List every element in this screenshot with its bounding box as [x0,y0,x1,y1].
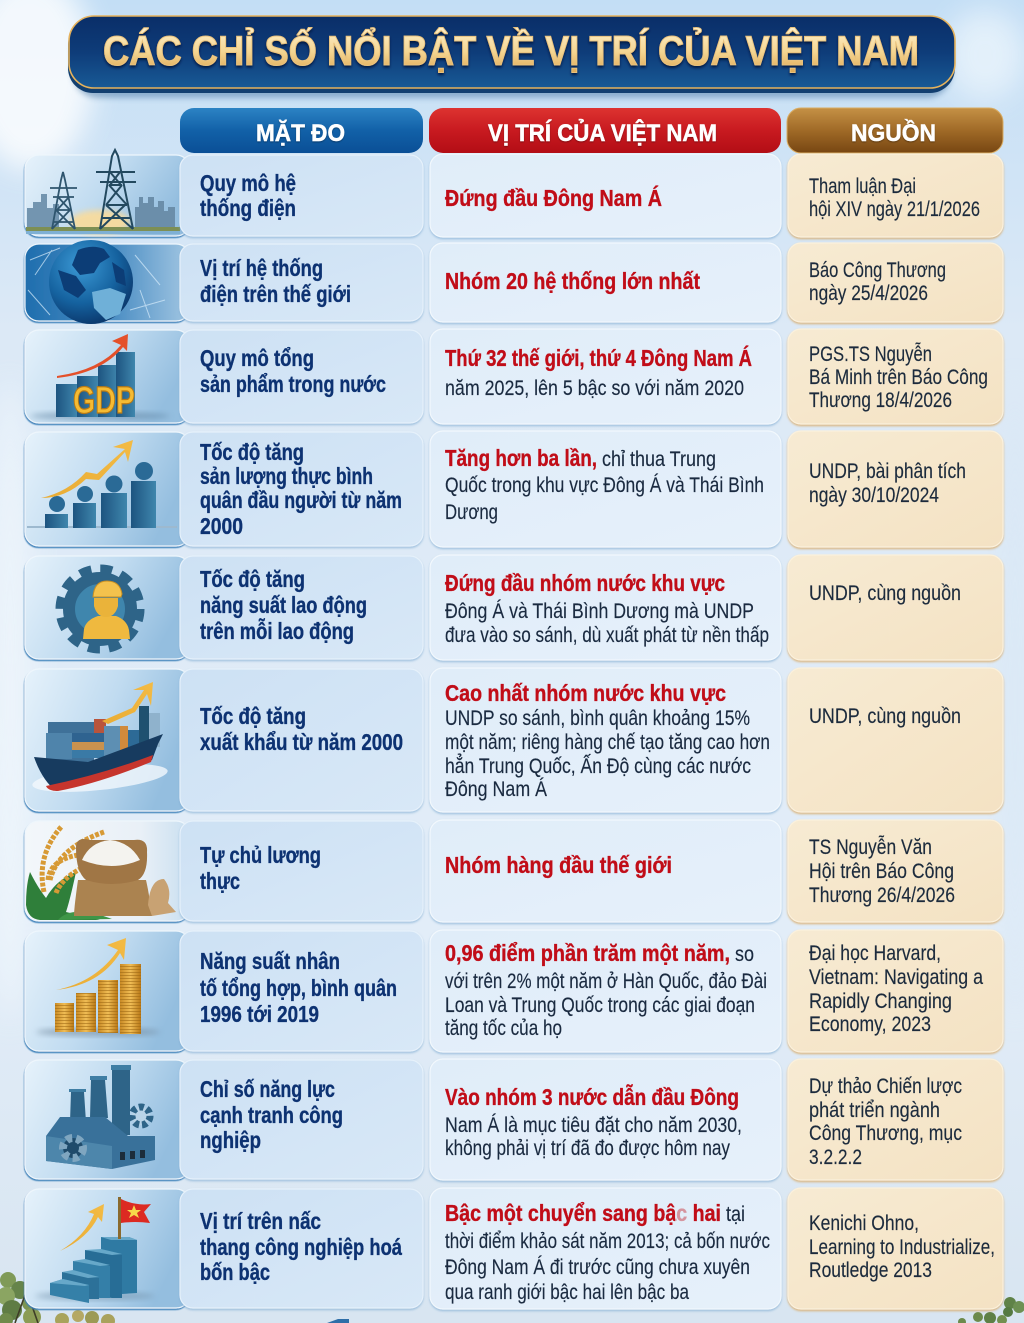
icon: factory with gears [25,1060,190,1179]
panel: metric [180,1189,423,1308]
panel: source [788,154,1003,237]
panel: metric [180,432,423,546]
header: Nguồn: NGUỒN [851,119,936,147]
header: Nguồn [787,108,1003,153]
panel: position: Đông Á và Thái Bình Dương mà UNDP [445,600,754,623]
panel: metric: 2000 [200,513,243,539]
header: Vị trí của Việt Nam [429,108,781,153]
panel: position: 0,96 điểm phần trăm một năm, [445,940,730,966]
row 1 [25,150,1003,237]
panel: metric: bốn bậc [200,1259,270,1285]
panel: position: năm 2025, lên 5 bậc so với năm 2020 [445,377,744,400]
icon: globe with network [25,240,190,324]
panel: metric: Vị trí hệ thống [200,255,323,281]
panel: position: đưa vào so sánh, dù xuất phát từ nền thấp [445,624,769,647]
row 9 [25,1059,1003,1180]
panel: position [430,930,781,1052]
panel: position: một năm; riêng hàng chế tạo tăng cao hơn [445,731,770,754]
panel: position: Đứng đầu Đông Nam Á [445,184,662,211]
panel: source: Công Thương, mục [809,1122,962,1145]
panel: source: Thương 26/4/2026 [809,884,955,907]
panel: position [430,820,781,922]
panel: metric: thang công nghiệp hoá [200,1234,402,1260]
panel: position: Quốc trong khu vực Đông Á và Thái Bình [445,474,764,497]
panel: source [788,329,1003,424]
panel: position: Nhóm hàng đầu thế giới [445,852,672,878]
panel: metric: Năng suất nhân [200,948,340,974]
panel: position [430,431,781,547]
decorative trees bottom right [958,1297,1024,1323]
row 7 [25,820,1003,922]
panel: position [430,1059,781,1180]
panel: source [788,930,1003,1052]
panel: source: Kenichi Ohno, [809,1212,919,1235]
panel: source: UNDP, cùng nguồn [809,705,961,728]
panel: position: tăng tốc của họ [445,1017,562,1040]
panel: source: Bá Minh trên Báo Công [809,366,988,389]
panel: position: UNDP so sánh, bình quân khoảng 15% [445,707,750,730]
panel: source: 3.2.2.2 [809,1146,862,1169]
panel: source: UNDP, cùng nguồn [809,582,961,605]
panel: metric: thực [200,868,240,894]
panel: source [788,1188,1003,1309]
panel: position: Bậc một chuyển sang bậc hai [445,1200,721,1226]
icon: power towers and city [25,150,190,236]
panel: position: Đông Nam Á [445,778,547,801]
panel: source: hội XIV ngày 21/1/2026 [809,198,980,221]
icon: stairs, flag and arrow [25,1189,190,1308]
panel: source [788,243,1003,322]
title text: CÁC CHỈ SỐ NỔI BẬT VỀ VỊ TRÍ CỦA VIỆT NAM [103,25,919,74]
panel: position: hẳn Trung Quốc, Ấn Độ cùng các nước [445,754,751,778]
panel: metric [180,330,423,423]
icon: rising bars with figures [25,432,190,546]
panel: source: phát triển ngành [809,1099,940,1122]
panel: source [788,820,1003,922]
row 4 [25,431,1003,547]
panel: position [430,1188,781,1309]
panel: metric [180,1060,423,1179]
panel: metric [180,821,423,921]
panel: position [430,668,781,812]
icon: GDP bar chart: GDP [73,380,135,422]
row 2 [25,240,1003,324]
row 10 [25,1188,1003,1309]
panel: source: PGS.TS Nguyễn [809,343,932,366]
panel: metric: Quy mô hệ [200,170,296,196]
panel: metric: tố tổng hợp, bình quân [200,975,397,1001]
panel: metric: Quy mô tổng [200,345,314,371]
panel: source: Hội trên Báo Công [809,860,954,883]
icon: coin stacks with arrow [25,931,190,1051]
panel: metric [180,556,423,659]
decorative trees bottom left [0,1272,115,1323]
panel: metric: quân đầu người từ năm [200,487,402,513]
icon: gear with worker [25,556,190,659]
panel: position: Dương [445,501,498,524]
panel: metric [180,669,423,811]
panel: metric: 1996 tới 2019 [200,1001,319,1027]
icon: container ship with arrow [25,669,190,811]
panel: source [788,431,1003,547]
panel: source: Routledge 2013 [809,1259,932,1282]
icon: GDP bar chart [25,330,190,423]
panel: position: qua ranh giới bậc hai lên bậc ba [445,1281,689,1304]
panel: source: Báo Công Thương [809,259,946,282]
panel: metric: Tốc độ tăng [200,566,305,592]
panel: source: UNDP, bài phân tích [809,460,966,483]
panel: position: Tăng hơn ba lần, [445,445,597,471]
panel: metric: cạnh tranh công [200,1102,343,1128]
panel: source: Vietnam: Navigating a [809,966,983,989]
header: Mặt đo: MẶT ĐO [256,119,345,147]
panel: metric [180,931,423,1051]
panel: source: Thương 18/4/2026 [809,389,952,412]
panel: metric: Tốc độ tăng [200,703,306,729]
panel: source: Tham luận Đại [809,175,916,198]
row 5 [25,555,1003,660]
row 8 [25,930,1003,1052]
row 6 [25,668,1003,812]
panel: position: chỉ thua Trung [602,448,716,471]
panel: position: Nhóm 20 hệ thống lớn nhất [445,268,700,294]
panel: position: Loan và Trung Quốc trong các giai đoạn [445,994,755,1017]
panel: metric: thống điện [200,195,296,221]
panel: metric: Tốc độ tăng [200,439,304,465]
panel: source: Rapidly Changing [809,990,952,1013]
panel: source: ngày 25/4/2026 [809,282,928,305]
panel: source: Đại học Harvard, [809,942,941,965]
header: Vị trí của Việt Nam: VỊ TRÍ CỦA VIỆT NAM [488,118,717,147]
panel: position [430,154,781,237]
panel: source: Dự thảo Chiến lược [809,1075,962,1098]
title banner [68,16,955,98]
panel: source: TS Nguyễn Văn [809,836,932,859]
panel: position: không phải vị trí đã đo được hôm nay [445,1137,730,1160]
panel: metric: năng suất lao động [200,592,367,618]
panel: position: với trên 2% một năm ở Hàn Quốc, đảo Đài [445,970,767,993]
panel: metric: Tự chủ lương [200,842,321,868]
panel: metric: nghiệp [200,1127,261,1153]
panel: position: so [735,943,754,966]
panel: metric: trên mỗi lao động [200,617,354,644]
panel: position: thời điểm khảo sát năm 2013; cả bốn nước [445,1230,770,1253]
icon: rice sack and stalks [25,821,190,921]
panel: position [430,329,781,424]
panel: position: tại [726,1203,745,1226]
panel: metric [180,155,423,236]
panel: metric: Vị trí trên nấc [200,1208,321,1234]
panel: source: Economy, 2023 [809,1013,931,1036]
panel: metric: xuất khẩu từ năm 2000 [200,729,403,755]
panel: source [788,555,1003,660]
panel: position: Nam Á là mục tiêu đặt cho năm 2030, [445,1114,742,1137]
panel: metric: điện trên thế giới [200,281,351,307]
panel: metric: sản lượng thực bình [200,463,373,489]
panel: position [430,555,781,660]
panel: metric [180,244,423,321]
panel: source [788,668,1003,812]
panel: source [788,1059,1003,1180]
panel: position: Đông Nam Á đi trước cũng chưa xuyên [445,1256,750,1279]
panel: metric: sản phẩm trong nước [200,371,386,397]
panel: position: Thứ 32 thế giới, thứ 4 Đông Nam Á [445,344,752,371]
panel: position: Vào nhóm 3 nước dẫn đầu Đông [445,1083,739,1110]
panel: position: Cao nhất nhóm nước khu vực [445,680,726,706]
panel: position [430,243,781,322]
decorative building bottom [327,1319,349,1323]
panel: position: Đứng đầu nhóm nước khu vực [445,570,725,596]
row 3 [25,329,1003,424]
header: Mặt đo [180,108,423,153]
panel: source: ngày 30/10/2024 [809,484,939,507]
panel: metric: Chỉ số năng lực [200,1076,335,1102]
